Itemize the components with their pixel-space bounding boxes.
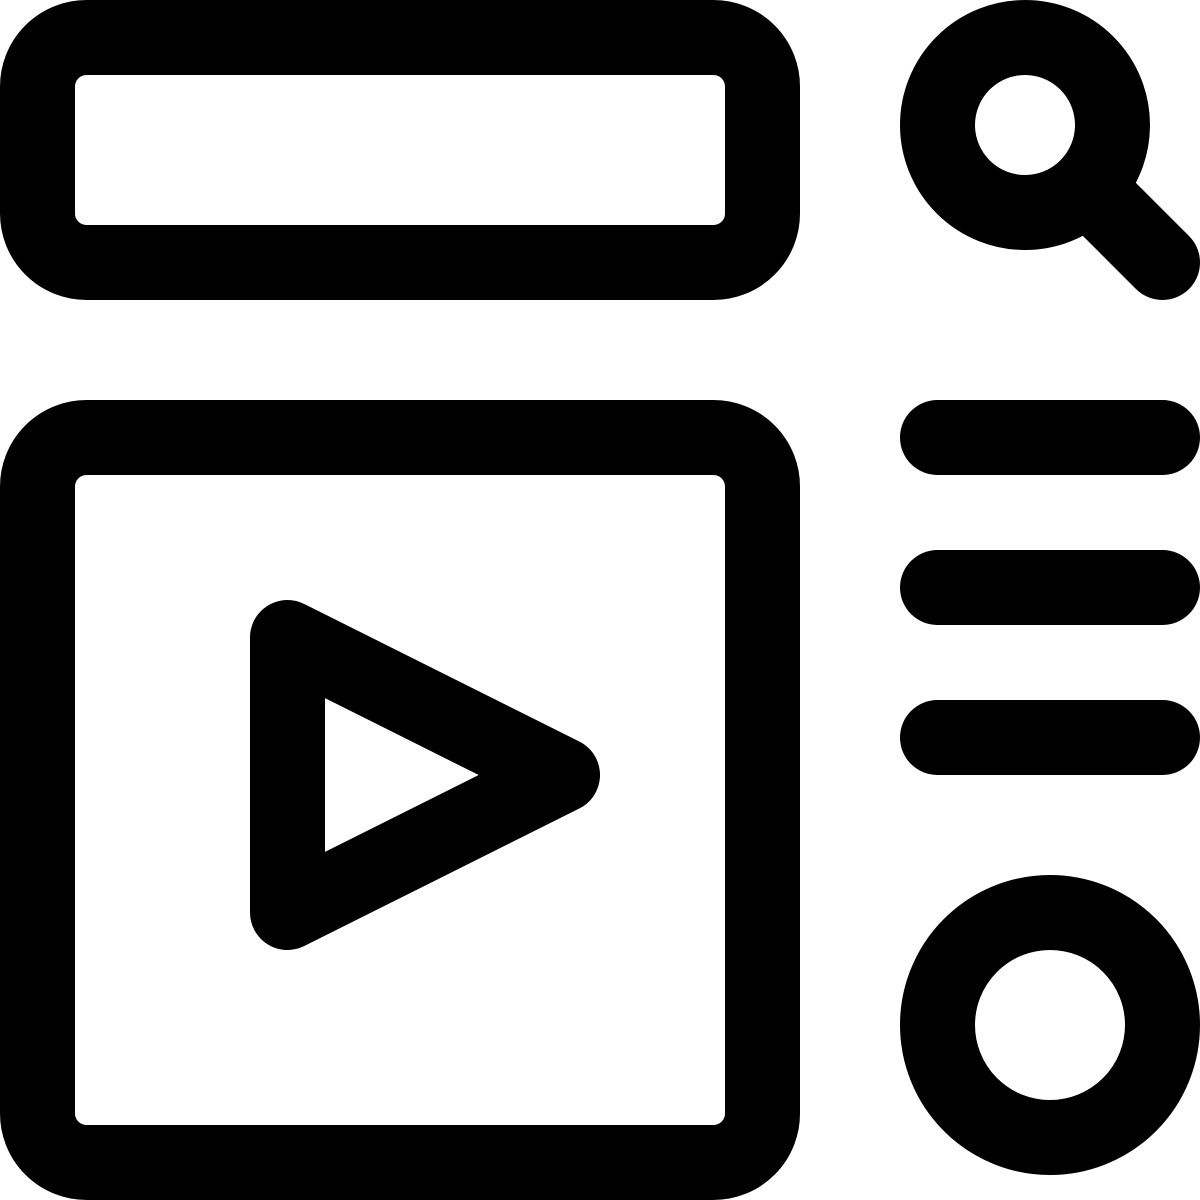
icon: circle button	[938, 912, 1162, 1138]
icon: magnifying glass	[938, 38, 1162, 262]
icon: play triangle	[288, 638, 562, 912]
list lines	[938, 438, 1162, 738]
video panel	[38, 438, 762, 1162]
header bar	[38, 38, 762, 262]
